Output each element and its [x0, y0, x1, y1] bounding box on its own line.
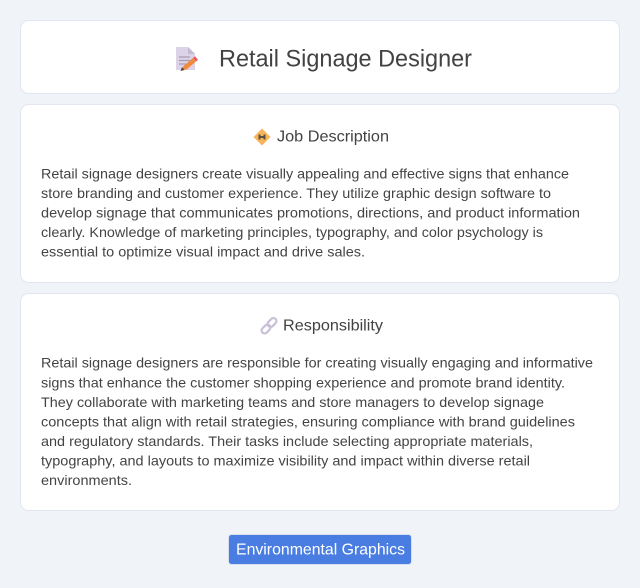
- heading: Retail Signage Designer: Retail Signage Designer: [219, 46, 472, 72]
- text block: responsibility body: They collaborate with marketing teams and store managers to develop signage: [41, 394, 544, 410]
- text block: responsibility body: signs that enhance the customer shopping experience and promote brand identity.: [41, 374, 565, 390]
- text block: job description body: essential to optimize visual impact and drive sales.: [41, 244, 365, 260]
- text block: responsibility body: environments.: [41, 472, 132, 488]
- icon: document with pencil: [176, 47, 198, 71]
- heading: Responsibility: Responsibility: [283, 318, 383, 334]
- text block: responsibility body: and regulatory standards. Their tasks include selecting appropriate materials,: [41, 433, 533, 449]
- text block: responsibility body: [41, 354, 593, 488]
- text block: job description body: clearly. Knowledge of marketing principles, typography, and color psychology is: [41, 224, 543, 240]
- panel: responsibility: [20, 294, 620, 510]
- text block: responsibility body: concepts that align with retail strategies, ensuring compliance with brand guidelines: [41, 414, 575, 430]
- heading: Job Description: Job Description: [277, 128, 389, 146]
- text block: responsibility body: typography, and layouts to maximize visibility and impact within diverse retail: [41, 452, 530, 468]
- icon: diamond sign: [254, 128, 270, 146]
- button: Environmental Graphics: Environmental Graphics: [236, 542, 405, 558]
- panel: title: [20, 20, 620, 94]
- text block: job description body: store branding and customer experience. They utilize graphic design software to: [41, 185, 551, 201]
- icon: chain link: [260, 317, 278, 335]
- text block: job description body: [41, 166, 580, 260]
- text block: job description body: develop signage that communicates promotions, directions, and product information: [41, 204, 580, 220]
- text block: job description body: Retail signage designers create visually appealing and effective signs that enhance: [41, 166, 569, 182]
- button: Environmental Graphics: [228, 534, 412, 564]
- text block: responsibility body: Retail signage designers are responsible for creating visually engaging and informative: [41, 354, 593, 370]
- panel: job description: [20, 104, 620, 282]
